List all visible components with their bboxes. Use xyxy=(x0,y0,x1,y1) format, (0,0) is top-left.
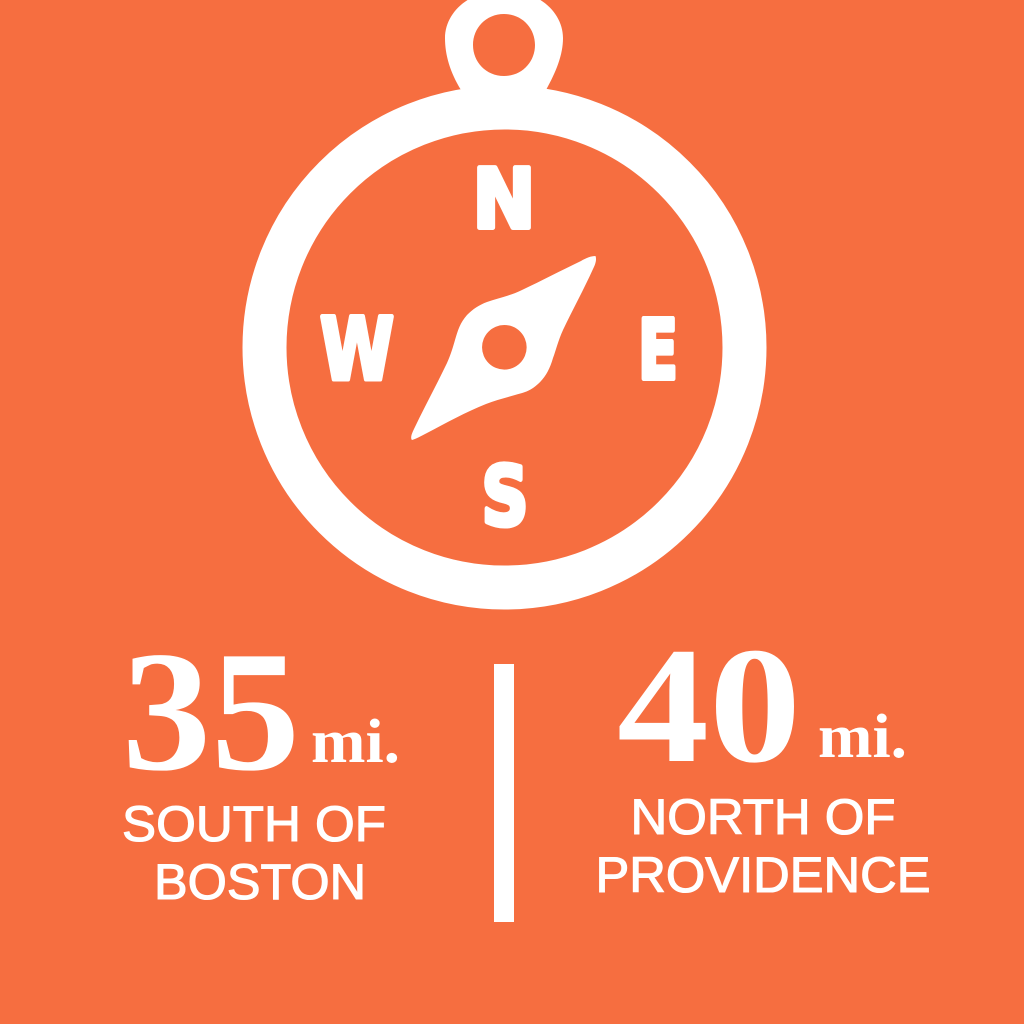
compass ring xyxy=(264,108,744,588)
stat: 35 miles south of Boston xyxy=(122,617,400,910)
label Providence: PROVIDENCE xyxy=(596,847,930,903)
label south of: SOUTH OF xyxy=(122,796,386,852)
label north of: NORTH OF xyxy=(630,789,896,845)
number 40: 40 xyxy=(617,613,801,797)
label Boston: BOSTON xyxy=(154,854,366,910)
letter S: S xyxy=(482,450,528,545)
vertical divider xyxy=(494,664,514,922)
unit mi.: mi. xyxy=(311,708,400,776)
compass loop xyxy=(445,0,563,90)
stat: 40 miles north of Providence xyxy=(596,613,930,903)
letter W: W xyxy=(320,300,394,400)
unit mi.: mi. xyxy=(818,703,907,771)
letter E: E xyxy=(638,304,678,398)
compass needle xyxy=(411,256,596,440)
icon: compass xyxy=(264,0,744,588)
number 35: 35 xyxy=(122,617,300,807)
letter N: N xyxy=(472,152,536,248)
